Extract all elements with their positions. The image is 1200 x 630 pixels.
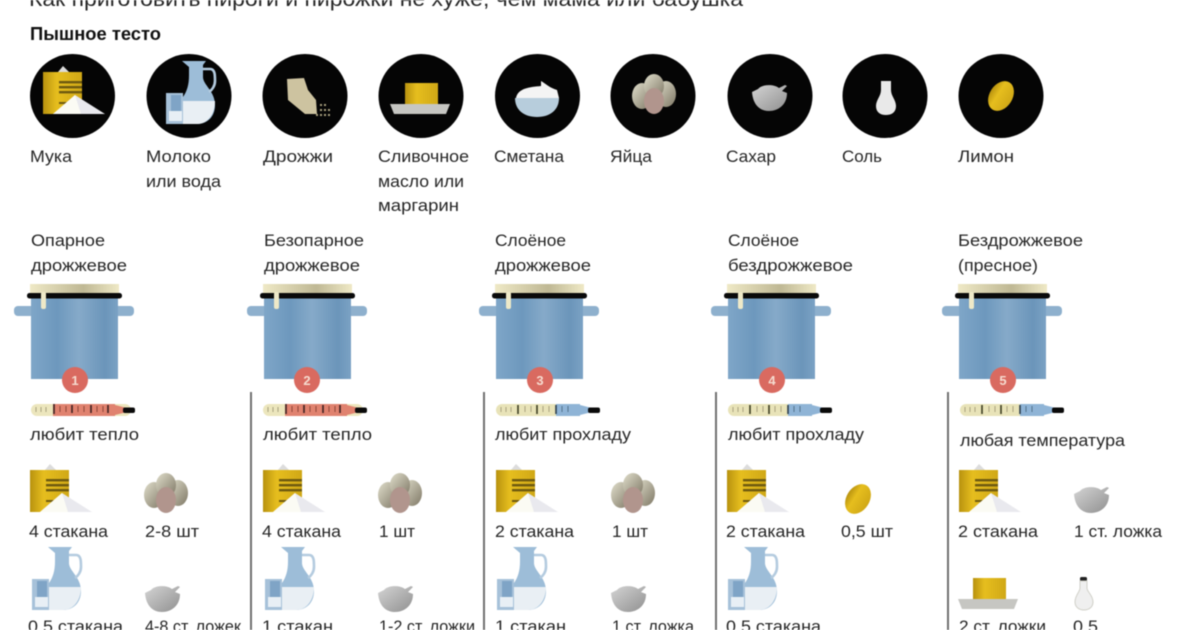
icon: sugar (1074, 487, 1109, 513)
divider 2 (483, 392, 485, 630)
icon: salt (1075, 577, 1093, 610)
label: salt: Соль (842, 147, 882, 166)
thermometer (31, 404, 135, 416)
heading: Слоёное (728, 231, 799, 250)
temperature label: любит тепло (263, 425, 372, 444)
amount: 2 стакана (726, 522, 806, 541)
amount: 2 стакана (958, 522, 1039, 541)
icon: sugar (145, 586, 180, 612)
heading: дрожжевое (31, 256, 127, 275)
thermometer (728, 404, 832, 416)
panel: dough 5 (942, 231, 1163, 630)
icon: lemon (840, 479, 876, 519)
panel: ingredients legend (30, 54, 1044, 215)
heading: Опарное (31, 231, 105, 250)
divider 1 (250, 392, 252, 630)
amount: 1 ст. ложка (1074, 522, 1163, 541)
label: butter or margarine: маргарин (378, 196, 459, 215)
icon: flour (727, 464, 789, 512)
thermometer (263, 404, 367, 416)
badge: 3 (536, 373, 544, 388)
amount: 2 стакана (495, 522, 575, 541)
badge (294, 367, 320, 393)
label: milk or water: или вода (146, 172, 222, 191)
amount: 4 стакана (262, 522, 342, 541)
panel: dough 2 (247, 231, 475, 630)
icon: butter (378, 54, 464, 138)
icon: pot (14, 284, 134, 379)
amount: 1 шт (612, 522, 648, 541)
icon: milk or water (146, 54, 232, 138)
amount: 0,5 шт (841, 522, 893, 541)
label: butter or margarine: масло или (378, 172, 464, 191)
temperature label: любит прохладу (728, 425, 865, 444)
label: butter or margarine: Сливочное (378, 147, 469, 166)
icon: butter (958, 578, 1018, 609)
badge: 2 (303, 373, 311, 388)
heading: Слоёное (495, 231, 566, 250)
heading: дрожжевое (495, 256, 591, 275)
label: flour: Мука (30, 147, 73, 166)
icon: yeast (262, 54, 348, 138)
icon: sugar (611, 586, 646, 612)
icon: lemon (958, 54, 1044, 138)
icon: milk (497, 547, 546, 610)
thermometer (496, 404, 600, 416)
label: milk or water: Молоко (146, 147, 211, 166)
temperature label: любит прохладу (495, 425, 632, 444)
badge (759, 367, 785, 393)
icon: pot (479, 284, 599, 379)
icon: milk (728, 547, 777, 610)
icon: pot (247, 284, 367, 379)
temperature label: любая температура (960, 431, 1126, 450)
icon: sugar (378, 586, 413, 612)
icon: flour (496, 464, 558, 512)
heading: бездрожжевое (728, 256, 853, 275)
icon: eggs (610, 54, 696, 138)
label: eggs: Яйца (610, 147, 653, 166)
label: sugar: Сахар (726, 147, 776, 166)
icon: flour (959, 464, 1021, 512)
icon: flour (30, 54, 115, 138)
temperature label: любит тепло (30, 425, 139, 444)
icon: flour (30, 464, 92, 512)
heading: Бездрожжевое (958, 231, 1083, 250)
icon: eggs (378, 473, 422, 513)
badge (527, 367, 553, 393)
icon: sour cream (495, 54, 580, 138)
icon: milk (32, 547, 81, 610)
amount: 2-8 шт (145, 522, 199, 541)
icon: pot (711, 284, 831, 379)
panel: dough 3 (479, 231, 695, 630)
thermometer (960, 404, 1064, 416)
heading: Безопарное (264, 231, 364, 250)
icon: flour (263, 464, 325, 512)
icon: eggs (144, 473, 188, 513)
divider 3 (715, 392, 717, 630)
icon: milk (265, 547, 314, 610)
label: yeast: Дрожжи (263, 147, 333, 166)
amount: 4 стакана (29, 522, 109, 541)
badge: 5 (999, 373, 1007, 388)
heading: section: Пышное тесто (30, 24, 161, 44)
badge: 4 (768, 373, 776, 388)
badge: 1 (71, 373, 79, 388)
icon: sugar (728, 54, 812, 138)
badge (990, 367, 1016, 393)
icon: pot (942, 284, 1062, 379)
panel: dough 1 (14, 231, 242, 630)
heading: (пресное) (958, 256, 1038, 275)
label: sour cream: Сметана (494, 147, 565, 166)
label: lemon: Лимон (958, 147, 1014, 166)
amount: 1 шт (379, 522, 415, 541)
icon: salt (842, 54, 928, 138)
panel: dough 4 (711, 231, 893, 630)
heading: дрожжевое (264, 256, 360, 275)
divider 4 (947, 392, 949, 630)
icon: eggs (611, 473, 655, 513)
badge (62, 367, 88, 393)
